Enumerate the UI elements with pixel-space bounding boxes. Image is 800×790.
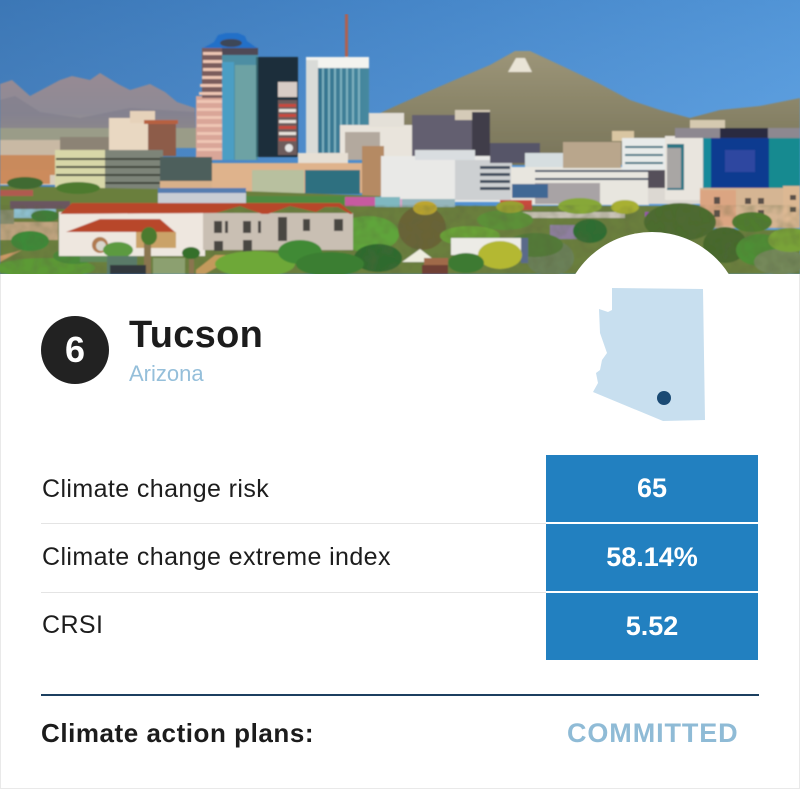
tan and white mid buildings	[563, 131, 700, 204]
metric value: extreme index	[546, 524, 758, 591]
metric value: extreme index: 58.14%	[606, 542, 698, 572]
pink tower	[196, 48, 223, 160]
metric label: climate change extreme index: Climate change extreme index	[42, 543, 391, 571]
mid-ground foliage base	[0, 186, 800, 274]
white and purple block	[340, 110, 490, 160]
photo: Tucson skyline	[0, 0, 800, 274]
left streets and rooftops	[0, 188, 346, 262]
right street colours	[345, 197, 663, 239]
climate action plans label: Climate action plans:	[41, 718, 314, 748]
blue dome	[203, 33, 258, 58]
antenna	[345, 14, 348, 58]
metric label: climate change risk: Climate change risk	[42, 475, 269, 503]
rank badge	[41, 316, 109, 384]
far left buildings	[0, 137, 110, 185]
texture: foliage mottling	[0, 205, 800, 274]
metric label: CRSI: CRSI	[42, 611, 103, 639]
metric value: CRSI	[546, 593, 758, 660]
metric value: climate change risk: 65	[637, 473, 667, 503]
blue glass building	[665, 120, 800, 200]
map circle tab	[575, 232, 729, 274]
rank badge: 6	[65, 329, 85, 370]
peach building	[160, 146, 384, 196]
white low building	[402, 238, 528, 274]
radio tower	[278, 82, 297, 155]
red-roof building	[59, 203, 353, 256]
low white garage	[511, 167, 650, 205]
palms and foreground	[80, 227, 364, 277]
yellow-green building	[0, 150, 212, 192]
teal tower	[222, 55, 259, 160]
beige building	[109, 111, 178, 156]
metric value: CRSI: 5.52	[626, 611, 678, 641]
brick apartments	[700, 186, 800, 228]
climate action plans status: COMMITTED	[567, 718, 739, 748]
icon: Arizona map with Tucson marker	[593, 288, 705, 421]
dark tower	[258, 57, 298, 157]
white central block	[381, 143, 575, 202]
trees	[0, 177, 800, 278]
state name: Arizona	[129, 361, 204, 386]
glass tower	[306, 57, 369, 153]
hill right with A	[369, 51, 800, 165]
card frame	[0, 274, 800, 789]
mountains left	[0, 73, 200, 148]
metric value: climate change risk	[546, 455, 758, 522]
city heading: Tucson	[129, 314, 263, 356]
